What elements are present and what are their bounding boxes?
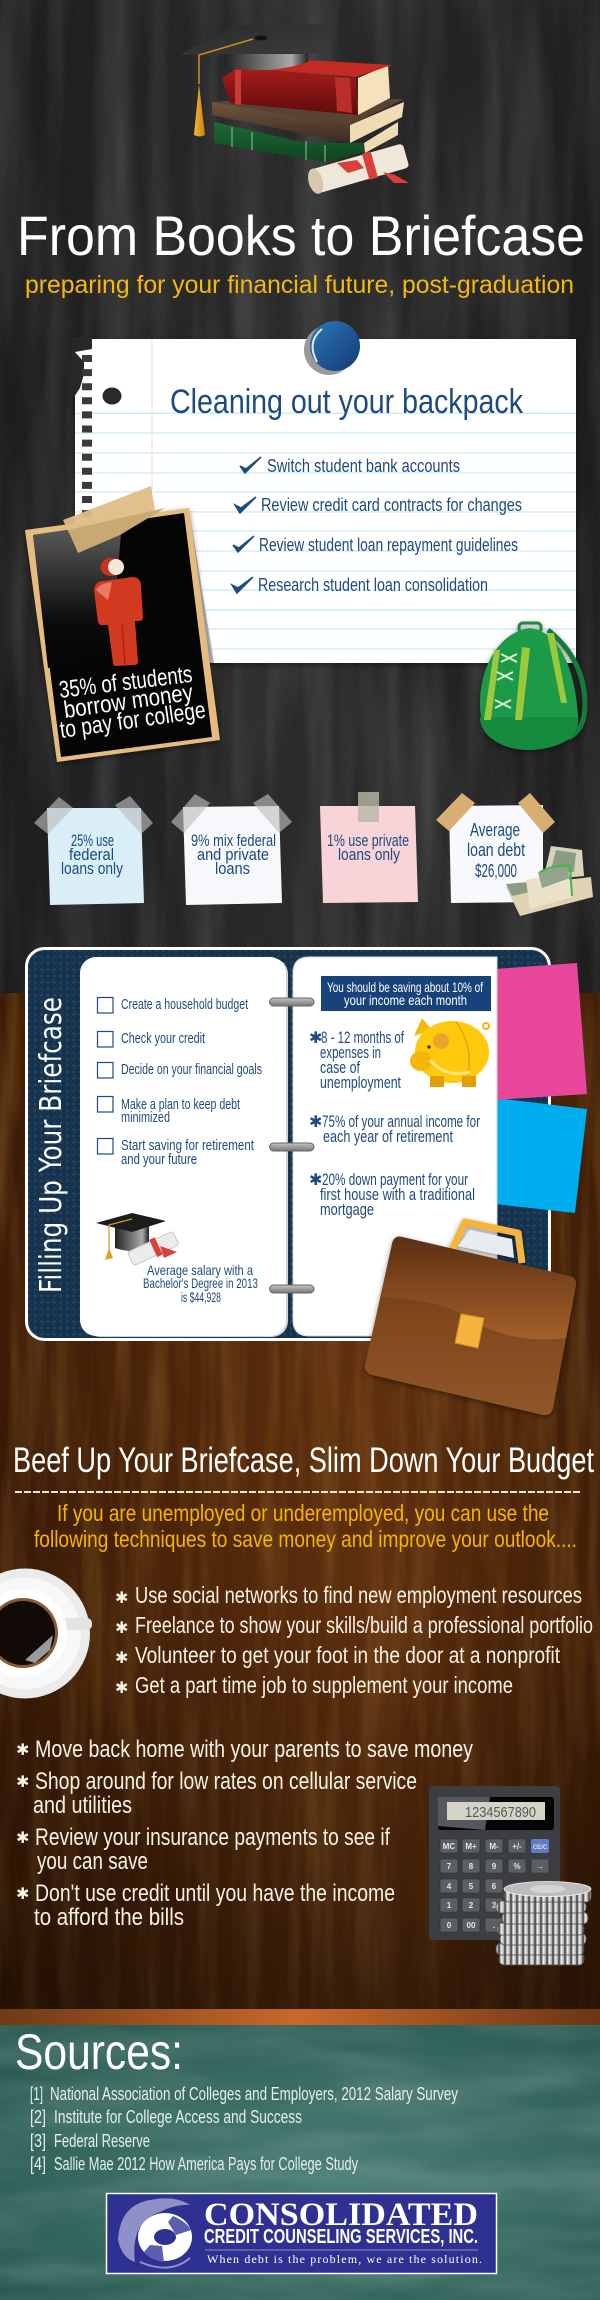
checklist [232, 456, 522, 595]
icon: calculator: 3 [492, 1901, 497, 1910]
tip 4: Get a part time job to supplement your income [135, 1672, 513, 1698]
dashed divider [15, 1491, 582, 1493]
icon: calculator [429, 1786, 560, 1940]
task 4 [98, 1096, 241, 1126]
task 4: Make a plan to keep debt [121, 1096, 241, 1113]
illustration: books, cap and diploma [180, 23, 410, 196]
icon: calculator: M+ [465, 1842, 477, 1851]
savings item: emergency fund: expenses in [320, 1043, 381, 1062]
icon: green backpack [480, 623, 585, 750]
salary note: Bachelor's Degree in 2013 [143, 1275, 258, 1291]
source 3 [30, 2131, 150, 2151]
source 2: [2] [30, 2107, 46, 2127]
tip 2: Shop around for low rates on cellular service [35, 1768, 417, 1795]
tip 3: Review your insurance payments to see if [35, 1824, 390, 1851]
sticky note: average loan debt: loan debt [467, 840, 525, 860]
icon: calculator: 4 [447, 1882, 452, 1891]
sticky note: private loans: loans only [338, 845, 400, 864]
pushpin [304, 321, 360, 375]
salary note: is $44,928 [181, 1289, 221, 1305]
task 1 [98, 996, 249, 1013]
sticky note: private loans: 1% use private [327, 831, 409, 850]
icon: calculator: → [536, 1862, 544, 1871]
savings item: down payment: ✱ [309, 1170, 322, 1189]
check item 2: Review credit card contracts for changes [261, 495, 522, 515]
tape [63, 486, 165, 553]
tip 3: you can save [37, 1848, 148, 1875]
subtitle: preparing for your financial future, post-graduation [25, 271, 574, 299]
left page [80, 957, 288, 1337]
sticky note: mix federal and private: and private [197, 845, 269, 864]
source 3: Federal Reserve [54, 2131, 150, 2151]
task 2 [98, 1030, 206, 1047]
logo: Consolidated Credit Counseling Services [106, 2194, 496, 2274]
logo: Consolidated Credit Counseling Services: When debt is the problem, we are the solution. [207, 2252, 482, 2266]
savings item: emergency fund [309, 1028, 404, 1092]
savings item: retirement: 75% of your annual income for [322, 1112, 480, 1131]
savings banner: You should be saving about 10% of [327, 979, 483, 995]
savings banner: your income each month [344, 992, 467, 1008]
tip 2 [16, 1768, 417, 1819]
source 3: [3] [30, 2131, 46, 2151]
person icon [94, 558, 143, 666]
side tabs [70, 1045, 507, 1260]
task 5: and your future [121, 1151, 197, 1168]
savings item: down payment: mortgage [320, 1200, 374, 1219]
savings item: emergency fund: 8 - 12 months of [321, 1028, 404, 1047]
red book [222, 60, 392, 115]
source 4: Sallie Mae 2012 How America Pays for College Study [54, 2154, 358, 2174]
task 5: Start saving for retirement [121, 1137, 255, 1154]
icon: coffee cup [0, 1568, 92, 1698]
tip 4: ✱ [115, 1678, 128, 1697]
panel: planner, filling up your briefcase [26, 948, 587, 1340]
task 5 [98, 1137, 255, 1168]
card caption: to pay for college [58, 697, 207, 744]
checklist: household tasks [98, 996, 262, 1168]
salary note: Average salary with a [147, 1262, 253, 1278]
sources heading: Sources: [15, 2024, 183, 2080]
section intro [34, 1500, 577, 1552]
background: green chalkboard and ledge [0, 2009, 600, 2300]
savings item: retirement: each year of retirement [323, 1127, 453, 1146]
sticky note: federal loans: 25% use [71, 831, 114, 850]
sticky note: average loan debt: Average [470, 820, 520, 840]
check item 3: Review student loan repayment guidelines [259, 535, 518, 555]
logo: Consolidated Credit Counseling Services: CONSOLIDATED [204, 2197, 478, 2233]
task 2: Check your credit [121, 1030, 206, 1047]
savings item: emergency fund: ✱ [309, 1028, 322, 1047]
source 2: Institute for College Access and Success [54, 2107, 302, 2127]
task 3 [98, 1061, 262, 1078]
icon: calculator: 00 [467, 1921, 476, 1930]
tip 4: Don't use credit until you have the income [35, 1880, 395, 1907]
icon: calculator: 8 [469, 1862, 474, 1871]
icon: calculator: 9 [492, 1862, 497, 1871]
sticky note: average loan debt: $26,000 [475, 861, 517, 881]
green book [214, 122, 398, 162]
savings item: down payment [309, 1170, 475, 1219]
icon: stack of money [506, 846, 593, 916]
icon: cap and diploma [96, 1213, 180, 1268]
savings item: emergency fund: unemployment [320, 1073, 401, 1092]
brown book [212, 99, 404, 143]
icon: stack of silver coins [496, 1882, 591, 1965]
icon: calculator: 7 [447, 1862, 452, 1871]
background: wood desk [0, 993, 600, 2009]
blue tab [495, 1098, 587, 1213]
icon: calculator: CE/C [533, 1845, 548, 1851]
panel heading: Cleaning out your backpack [170, 383, 524, 421]
card caption: 35% of students [57, 661, 194, 704]
source 4 [30, 2154, 358, 2174]
source 1: National Association of Colleges and Employers, 2012 Salary Survey [50, 2084, 458, 2104]
card caption: borrow money [62, 679, 195, 724]
icon: calculator: +/- [512, 1842, 522, 1851]
tip 2: ✱ [16, 1772, 29, 1791]
source 1: [1] [30, 2084, 43, 2104]
icon: calculator: . [493, 1921, 495, 1930]
right page [293, 957, 497, 1336]
logo: Consolidated Credit Counseling Services: CREDIT COUNSELING SERVICES, INC. [204, 2226, 478, 2248]
icon: calculator: % [513, 1862, 521, 1871]
tip 2: ✱ [115, 1618, 128, 1637]
tip 3 [16, 1824, 390, 1875]
sources list [30, 2084, 458, 2174]
sticky note: mix federal and private: 9% mix federal [191, 831, 276, 850]
tip 2: and utilities [33, 1792, 132, 1819]
tip 1: ✱ [115, 1588, 128, 1607]
tip 4: to afford the bills [34, 1904, 184, 1931]
tip 3: ✱ [16, 1828, 29, 1847]
icon: calculator: 5 [469, 1882, 474, 1891]
savings item: down payment: first house with a traditional [320, 1185, 475, 1204]
icon: calculator: MC [443, 1842, 455, 1851]
icon: calculator: 1234567890 [465, 1804, 536, 1821]
panel: photo card, 35% of students [25, 486, 220, 762]
savings item: retirement: ✱ [309, 1112, 322, 1131]
sticky note: federal loans [34, 796, 153, 905]
tip 3: ✱ [115, 1648, 128, 1667]
sticky note: average loan debt [436, 793, 555, 903]
icon: calculator: 1 [447, 1901, 452, 1910]
graduation cap [180, 23, 334, 136]
salary note [143, 1262, 258, 1305]
source 4: [4] [30, 2154, 46, 2174]
savings item: down payment: 20% down payment for your [322, 1170, 468, 1189]
task 3: Decide on your financial goals [121, 1061, 262, 1078]
pink tab [495, 963, 587, 1100]
list: employment tips [115, 1582, 593, 1698]
vertical section title: Filling Up Your Briefcase [34, 997, 69, 1293]
diploma [305, 142, 410, 196]
sticky note: private loans [320, 792, 418, 903]
check item 1: Switch student bank accounts [267, 456, 460, 476]
icon: calculator: 0 [447, 1921, 452, 1930]
icon: piggy bank [410, 1018, 489, 1087]
sticky note: federal loans: loans only [61, 859, 123, 878]
icon: briefcase [365, 1222, 576, 1415]
planner cover [26, 948, 550, 1340]
sticky note: federal loans: federal [69, 845, 114, 864]
sticky note: mix federal and private [171, 794, 292, 905]
task 4: minimized [121, 1109, 170, 1126]
paper sheet [68, 337, 576, 663]
tip 4: ✱ [16, 1884, 29, 1903]
tip 1: Move back home with your parents to save money [35, 1736, 473, 1763]
card caption [57, 661, 207, 744]
panel: notebook paper, cleaning out your backpack [68, 321, 576, 663]
icon: life preserver [118, 2198, 192, 2268]
binder rings [270, 998, 314, 1293]
list: budget tips [16, 1736, 473, 1931]
tip 1: ✱ [16, 1740, 29, 1759]
check item 4: Research student loan consolidation [258, 575, 488, 595]
icon: calculator: 6 [492, 1882, 497, 1891]
savings banner [321, 976, 491, 1011]
sticky note: mix federal and private: loans [215, 859, 250, 878]
task 1: Create a household budget [121, 996, 249, 1013]
background: chalkboard [0, 0, 600, 993]
icon: calculator: 2 [469, 1901, 474, 1910]
icon: calculator: M- [489, 1842, 499, 1851]
savings item: retirement [309, 1112, 480, 1146]
tip 4 [16, 1880, 395, 1931]
savings item: emergency fund: case of [320, 1058, 360, 1077]
